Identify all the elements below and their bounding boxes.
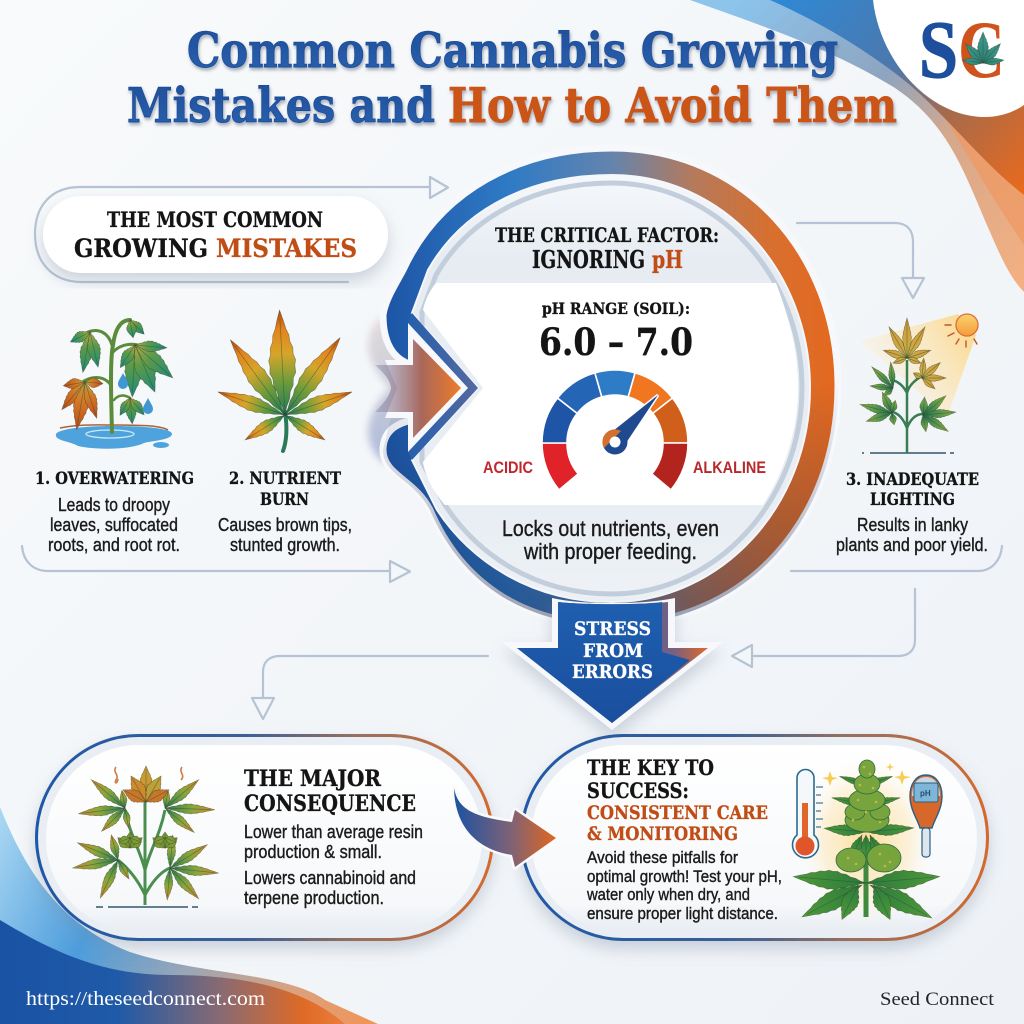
small buds <box>115 832 180 852</box>
success text 4: ensure proper light distance. <box>587 904 778 923</box>
stems <box>84 320 138 432</box>
white band <box>423 283 798 505</box>
label: overwatering <box>35 469 194 555</box>
success text 2: optimal growth! Test your pH, <box>587 867 782 886</box>
title line 2 blue: Mistakes and <box>127 78 435 134</box>
connector: top arrow around heading pill <box>35 177 448 282</box>
name line 2: BURN <box>260 490 309 509</box>
stress label line 2: FROM <box>583 640 643 662</box>
top bud <box>120 766 172 807</box>
pill body <box>522 736 988 940</box>
top fan <box>882 318 946 391</box>
name line 1: 3. INADEQUATE <box>846 470 979 489</box>
stem and ground <box>862 452 954 454</box>
sun <box>945 314 978 347</box>
chevron band <box>408 313 478 460</box>
plant: overwatering <box>56 316 178 449</box>
success orange line 1: CONSISTENT CARE <box>587 802 768 824</box>
pH range label: pH RANGE (SOIL): <box>542 299 690 318</box>
puddle <box>56 425 172 449</box>
connector: top right arrow <box>797 223 924 298</box>
line 2: stunted growth. <box>230 534 340 555</box>
pill line 2 dark: GROWING <box>74 234 208 264</box>
plant: inadequate lighting <box>859 314 978 453</box>
factor description line 2: with proper feeding. <box>523 539 697 564</box>
gauge needle <box>602 395 658 454</box>
connector: lower left arrow <box>22 546 410 582</box>
pill line 2 orange: MISTAKES <box>216 234 357 264</box>
success heading line 1: THE KEY TO <box>587 755 714 780</box>
heading pill <box>43 196 388 273</box>
lower and mid left fans <box>859 362 956 435</box>
line 1: Causes brown tips, <box>218 514 352 535</box>
consequence heading line 1: THE MAJOR <box>244 766 381 792</box>
bottom-left wave <box>0 807 378 1024</box>
haze behind arrow <box>368 315 425 462</box>
arrow: stress from errors <box>502 598 723 730</box>
connector: stress to consequence <box>252 656 488 719</box>
stress label line 1: STRESS <box>574 618 651 640</box>
label acidic: ACIDIC <box>483 458 533 477</box>
logo letter S: S <box>919 4 958 95</box>
connector: right to stress arrow <box>732 589 915 667</box>
line 3: roots, and root rot. <box>48 534 180 555</box>
label alkaline: ALKALINE <box>693 458 766 477</box>
success orange line 2: & MONITORING <box>587 823 738 845</box>
mid right fan <box>919 358 927 378</box>
pill body <box>36 736 492 940</box>
heat marks <box>115 767 183 783</box>
consequence text 4: terpene production. <box>244 887 384 908</box>
success heading line 2: SUCCESS: <box>587 778 689 803</box>
icon: pH meter <box>910 775 942 857</box>
title <box>127 23 897 134</box>
footer url: https://theseedconnect.com <box>26 988 265 1010</box>
drops <box>118 373 153 414</box>
icon: thermometer <box>792 770 823 858</box>
title line 1: Common Cannabis Growing <box>187 23 838 79</box>
consequence heading line 2: CONSEQUENCE <box>244 791 416 817</box>
panel: key to success <box>522 736 988 940</box>
factor subheading: IGNORING <box>532 245 645 274</box>
plant: stressed <box>72 766 219 907</box>
buds <box>836 760 901 872</box>
logo letter C: C <box>958 4 1005 95</box>
label: inadequate lighting <box>836 470 988 555</box>
stress label line 3: ERRORS <box>572 661 653 683</box>
consequence text 2: production & small. <box>244 841 382 862</box>
light beam <box>860 314 976 417</box>
line 1: Leads to droopy <box>58 494 171 515</box>
entering arrow <box>375 323 468 452</box>
line 2: plants and poor yield. <box>836 534 988 555</box>
inner disc <box>412 175 810 602</box>
arrow: consequence to success <box>454 788 556 867</box>
plant: healthy cola <box>792 760 941 926</box>
line 1: Results in lanky <box>857 514 969 535</box>
logo leaf <box>962 32 1004 66</box>
footer brand: Seed Connect <box>880 989 995 1010</box>
pH word: pH <box>652 245 683 274</box>
line 2: leaves, suffocated <box>50 514 178 535</box>
leaves <box>68 316 178 424</box>
name line 2: LIGHTING <box>870 490 955 509</box>
name line 1: 2. NUTRIENT <box>229 469 342 488</box>
factor description line 1: Locks out nutrients, even <box>502 516 719 541</box>
ring <box>383 148 838 625</box>
plant: nutrient burn leaf <box>215 309 355 451</box>
panel: major consequence <box>36 736 492 940</box>
title line 2 orange: How to Avoid Them <box>448 78 897 134</box>
meter screen text: pH <box>920 789 931 798</box>
success text 3: water only when dry, and <box>586 885 750 904</box>
logo badge <box>873 0 1024 117</box>
top-right corner wave <box>690 0 1024 292</box>
factor heading: THE CRITICAL FACTOR: <box>495 223 719 247</box>
name: 1. OVERWATERING <box>35 469 194 488</box>
gauge <box>542 370 688 490</box>
pH range value: 6.0 – 7.0 <box>539 320 693 364</box>
consequence text 1: Lower than average resin <box>244 821 423 842</box>
label: nutrient burn <box>218 469 352 555</box>
success text 1: Avoid these pitfalls for <box>587 848 738 867</box>
inner ring line <box>422 183 802 594</box>
glow <box>794 752 938 928</box>
panel: critical factor circle <box>368 148 838 625</box>
connector: lower right line <box>791 546 1002 571</box>
pill line 1: THE MOST COMMON <box>107 207 323 232</box>
sparkles <box>822 763 911 786</box>
consequence text 3: Lowers cannabinoid and <box>244 867 416 888</box>
